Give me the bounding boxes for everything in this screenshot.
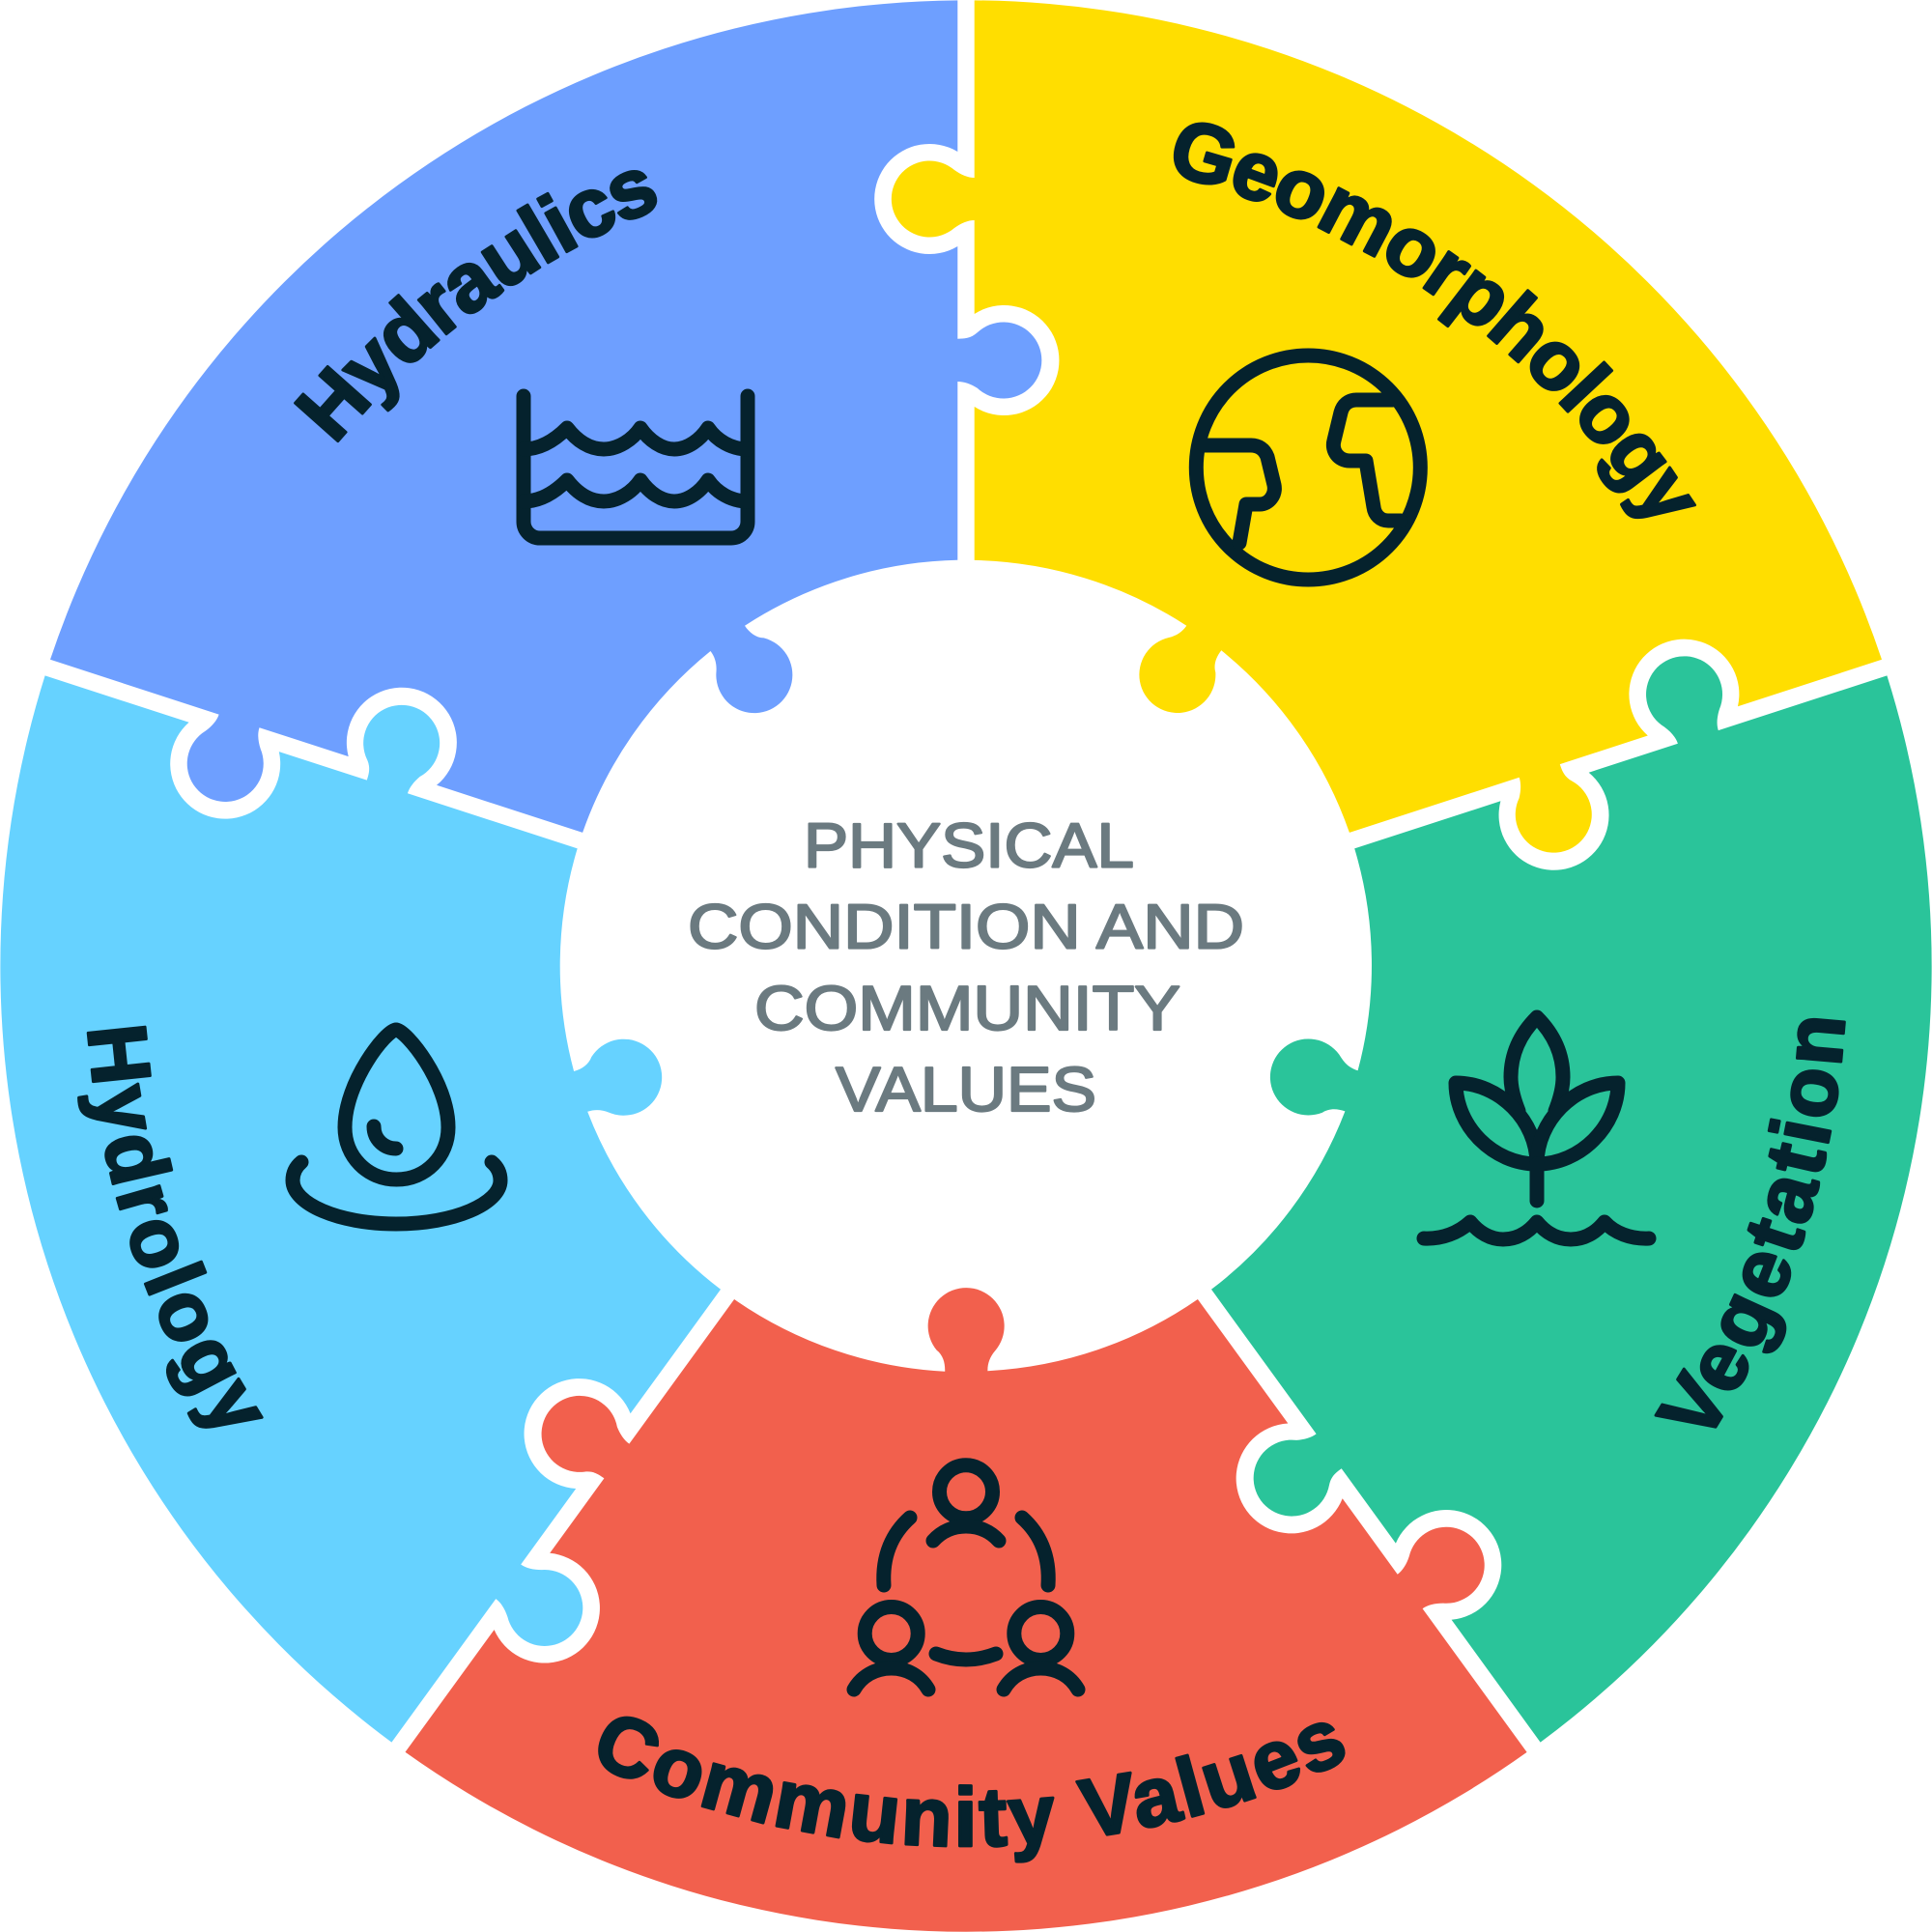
puzzle piece: geomorphology bbox=[892, 0, 1882, 853]
center title: VALUES bbox=[836, 1054, 1096, 1124]
puzzle piece: hydrology bbox=[0, 675, 721, 1743]
center title: CONDITION AND bbox=[688, 892, 1244, 962]
panel: vegetation bbox=[1211, 656, 1932, 1743]
puzzle piece: vegetation bbox=[1211, 656, 1932, 1743]
panel: hydrology bbox=[0, 675, 721, 1743]
icon: globe bbox=[1196, 355, 1420, 580]
icon: water drop with ripple bbox=[293, 1030, 500, 1224]
center title bbox=[688, 810, 1244, 1124]
panel: geomorphology bbox=[891, 0, 1882, 853]
panel: hydraulics bbox=[50, 0, 1041, 833]
icon: plant and water bbox=[1424, 1017, 1649, 1239]
icon: three connected people bbox=[854, 1465, 1078, 1690]
panel: community values bbox=[406, 1288, 1526, 1932]
puzzle piece: community values bbox=[406, 1288, 1527, 1932]
center title: COMMUNITY bbox=[754, 973, 1180, 1043]
heading: Vegetation: Vegetation bbox=[1654, 1018, 1846, 1429]
heading: Community Values: Community Values bbox=[598, 1716, 1346, 1863]
center title: PHYSICAL bbox=[804, 810, 1134, 881]
heading: Geomorphology: Geomorphology bbox=[1173, 122, 1696, 520]
icon: water channel bbox=[524, 396, 748, 538]
puzzle piece: hydraulics bbox=[50, 0, 1041, 833]
heading: Hydraulics: Hydraulics bbox=[294, 170, 657, 442]
heading: Hydrology: Hydrology bbox=[77, 1026, 264, 1429]
